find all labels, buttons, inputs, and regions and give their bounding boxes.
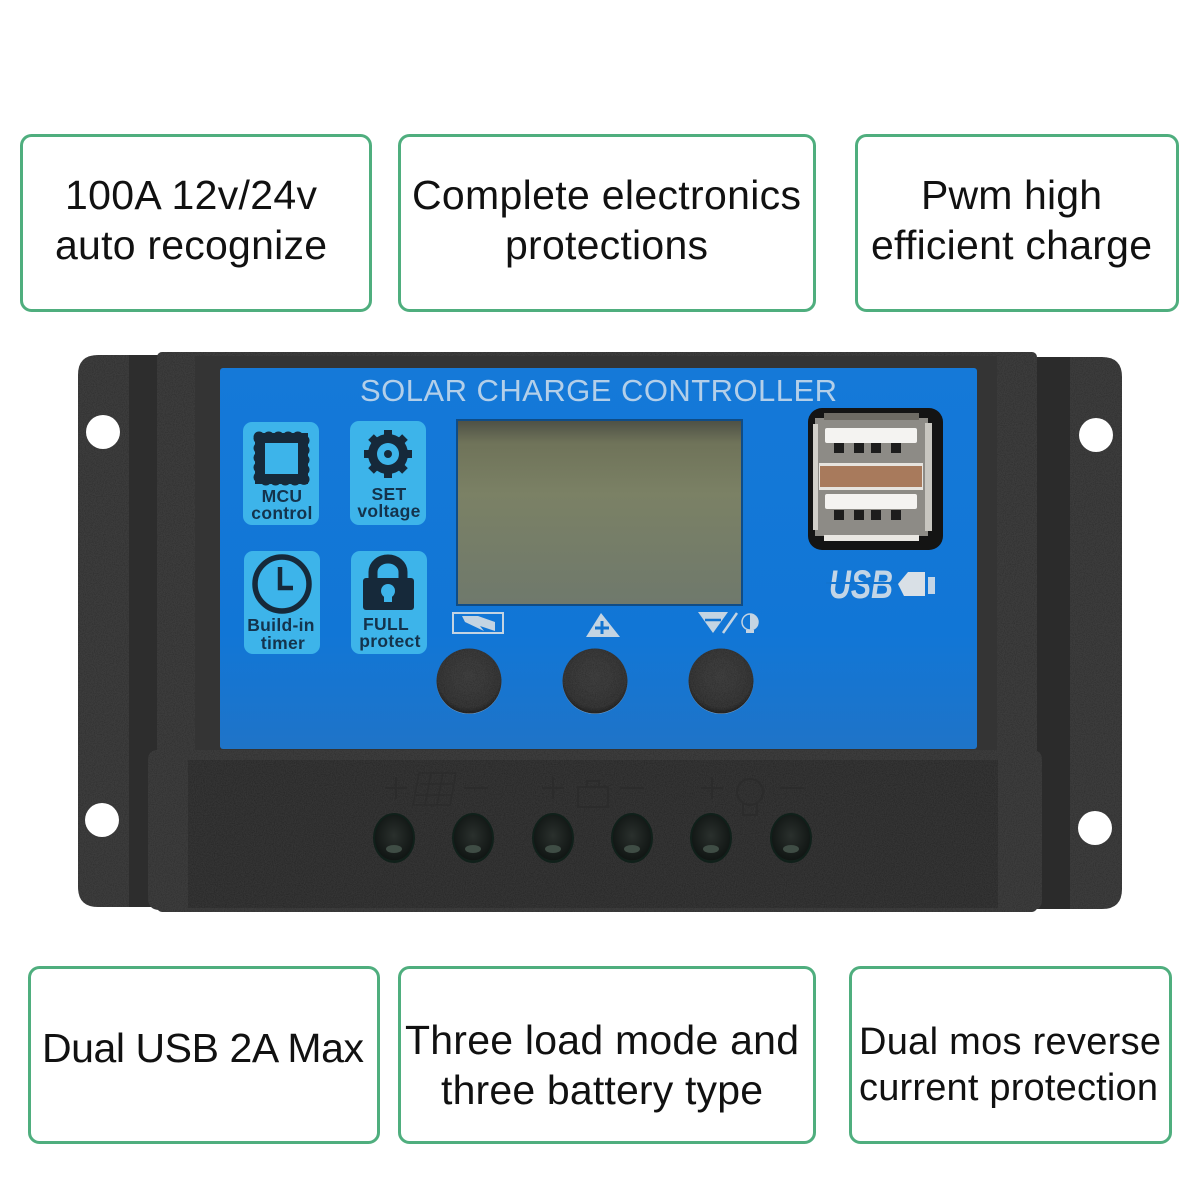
feature card: 100A auto recognize: auto recognize <box>55 222 327 268</box>
polarity and symbol marks <box>385 773 804 815</box>
tile: SET voltage: voltage <box>357 501 421 521</box>
solar charge controller device <box>78 352 1122 912</box>
right flange groove <box>1037 357 1070 909</box>
feature card: PWM high efficient charge: Pwm high <box>921 172 1102 218</box>
feature card: Dual USB 2A Max: Dual USB 2A Max <box>42 1025 364 1071</box>
right mounting flange <box>1060 357 1122 909</box>
tile: MCU control <box>243 422 319 525</box>
tile: MCU control: MCU <box>262 486 302 506</box>
feature card: complete electronics protections: protections <box>505 222 708 268</box>
housing inner recess shading <box>195 356 997 756</box>
feature card: PWM high efficient charge <box>856 136 1178 310</box>
feature card: three load mode and battery type <box>400 968 814 1142</box>
dual USB port <box>808 408 943 550</box>
feature card: three load mode and battery type: Three load mode and <box>405 1017 799 1063</box>
feature card: complete electronics protections: Complete electronics <box>412 172 801 218</box>
USB logo: USB <box>829 563 893 607</box>
tile: SET voltage <box>350 421 426 525</box>
tile: SET voltage: SET <box>372 484 406 504</box>
left mounting flange <box>78 355 165 907</box>
icon: up plus label <box>586 613 620 637</box>
terminal screws <box>374 814 811 862</box>
icon: mode button label <box>453 613 503 633</box>
feature card: dual MOS reverse current protection: Dual mos reverse <box>859 1021 1161 1063</box>
terminal block <box>148 750 1042 910</box>
blue front panel <box>220 368 977 749</box>
feature card: dual MOS reverse current protection: current protection <box>859 1067 1158 1109</box>
LCD screen <box>456 419 743 606</box>
panel title: SOLAR CHARGE CONTROLLER <box>360 373 837 408</box>
feature card: PWM high efficient charge: efficient charge <box>871 222 1152 268</box>
feature card: three load mode and battery type: three battery type <box>441 1067 763 1113</box>
tile: FULL protect: FULL <box>363 614 409 634</box>
feature card: Dual USB 2A Max <box>30 968 378 1142</box>
feature card: complete electronics protections <box>400 136 814 310</box>
tile: FULL protect: protect <box>359 631 421 651</box>
feature card: 100A auto recognize: 100A 12v/24v <box>65 172 318 218</box>
tile: FULL protect <box>351 551 427 654</box>
tile: Build-in timer <box>244 551 320 654</box>
mounting holes <box>85 415 1113 845</box>
tile: MCU control: control <box>251 503 313 523</box>
feature card: 100A auto recognize <box>22 136 370 310</box>
feature card: dual MOS reverse current protection <box>850 968 1170 1142</box>
main housing <box>157 352 1037 912</box>
left flange groove <box>129 355 158 907</box>
tile: Build-in timer: timer <box>261 633 305 653</box>
icon: down and bulb label <box>698 612 758 633</box>
tile: Build-in timer: Build-in <box>247 615 315 635</box>
round buttons <box>436 648 754 714</box>
